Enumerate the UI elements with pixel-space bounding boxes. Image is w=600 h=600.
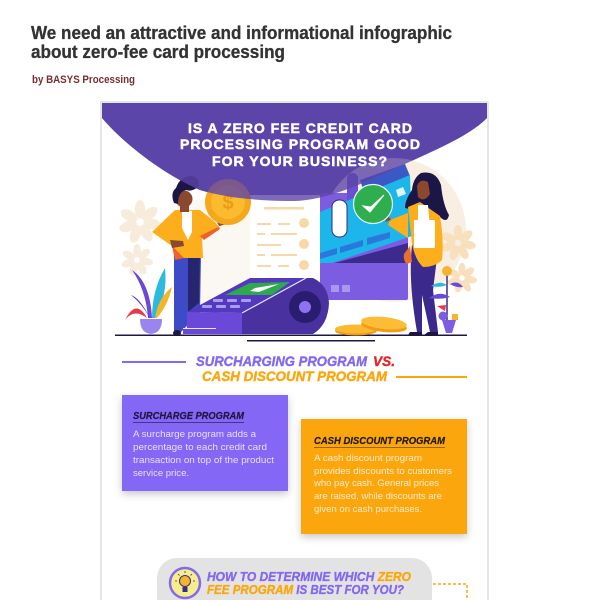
ground line <box>115 334 467 336</box>
gold dollar coin: $ <box>222 192 234 214</box>
poster heading: IS A ZERO FEE CREDIT CARD <box>188 120 412 136</box>
surcharge description: service price. <box>133 468 189 479</box>
comparison heading: CASH DISCOUNT PROGRAM <box>202 368 387 384</box>
panel: surcharge program <box>122 395 288 491</box>
cash discount description: given on cash purchases. <box>314 504 422 515</box>
green check badge <box>354 184 392 224</box>
purple banner base <box>102 103 487 201</box>
poster heading <box>180 120 420 169</box>
page title <box>31 23 452 62</box>
receipt <box>250 195 322 295</box>
panel: cash discount program <box>301 419 467 534</box>
cash discount description: are raised, while discounts are <box>314 491 442 502</box>
background cream shapes <box>177 158 466 320</box>
surcharge description: A surcharge program adds a <box>133 429 257 440</box>
poster heading: FOR YOUR BUSINESS? <box>212 153 387 169</box>
pill heading: FEE PROGRAM IS BEST FOR YOU? <box>207 583 404 597</box>
credit cards and wallet <box>320 164 412 300</box>
comparison heading: SURCHARGING PROGRAM <box>196 353 367 369</box>
surcharge description <box>133 429 274 479</box>
comparison heading <box>122 353 467 384</box>
left plant <box>125 268 172 334</box>
how to determine pill <box>157 558 432 600</box>
surcharge heading: SURCHARGE PROGRAM <box>133 411 245 422</box>
surcharge description: percentage to each credit card <box>133 442 267 453</box>
illustration <box>115 158 478 342</box>
pill heading <box>207 570 411 597</box>
byline: by BASYS Processing <box>32 74 135 86</box>
poster heading: PROCESSING PROGRAM GOOD <box>180 136 420 152</box>
right plant <box>429 266 463 333</box>
purple title banner <box>102 103 487 201</box>
poster panel <box>100 101 489 600</box>
cash discount heading: CASH DISCOUNT PROGRAM <box>314 436 446 447</box>
woman figure <box>385 172 449 335</box>
cash discount description: who pay cash. General prices <box>313 478 439 489</box>
decorative flowers <box>118 200 478 294</box>
page title: We need an attractive and informational infographic <box>31 23 452 43</box>
cash discount description: provides discounts to customers <box>314 466 452 477</box>
gold dollar coin <box>205 179 251 225</box>
man figure <box>152 176 232 336</box>
page title: about zero-fee card processing <box>31 42 285 62</box>
cash discount description: A cash discount program <box>314 453 422 464</box>
dashed connector <box>433 584 467 600</box>
ground shadow <box>247 340 375 342</box>
POS terminal <box>183 278 329 334</box>
cash discount description <box>313 453 452 515</box>
pill heading: HOW TO DETERMINE WHICH ZERO <box>207 570 411 584</box>
comparison heading: VS. <box>373 353 395 369</box>
coins on floor <box>335 315 408 336</box>
surcharge description: transaction on top of the product <box>133 455 274 466</box>
icon: light bulb <box>170 568 200 598</box>
